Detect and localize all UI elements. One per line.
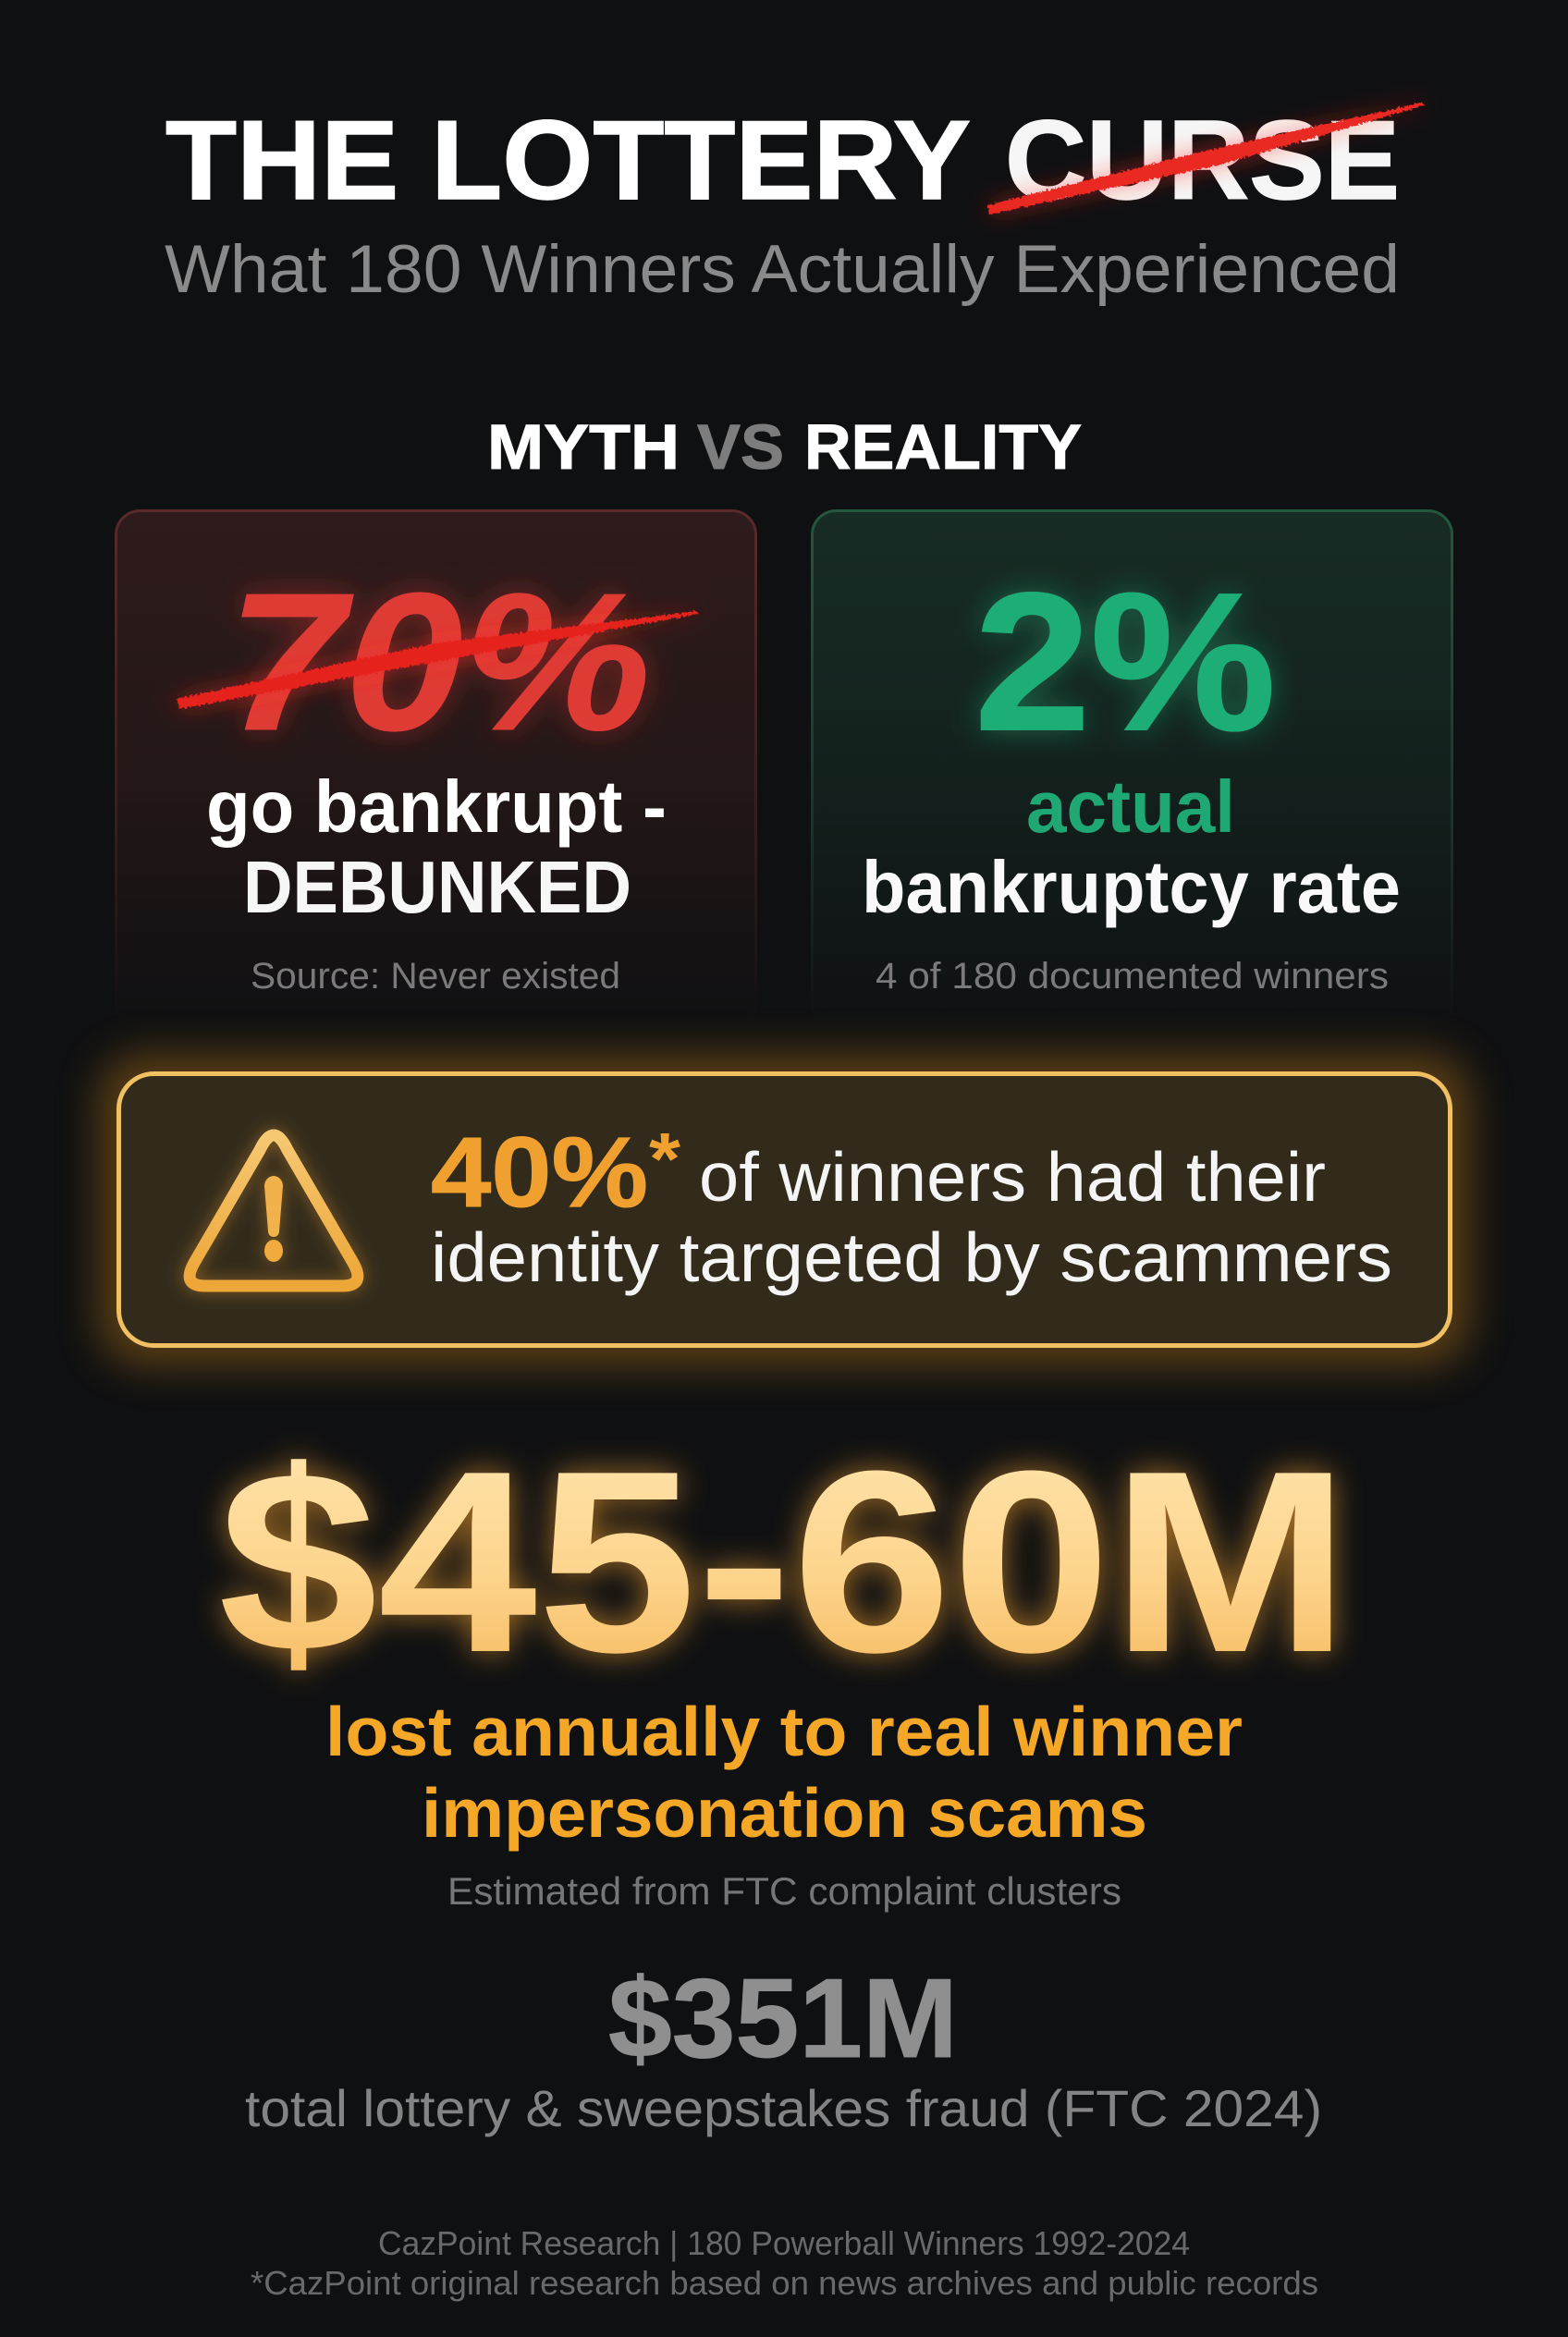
callout text: of winners had their — [699, 1138, 1326, 1216]
red strike through 70% — [177, 611, 699, 709]
footer: CazPoint Research | 180 Powerball Winners 1992-2024 — [378, 2224, 1190, 2262]
annual loss description — [325, 1693, 1243, 1852]
footer: *CazPoint original research based on news archives and public records — [251, 2264, 1318, 2302]
section heading: myth vs reality: MYTH — [487, 411, 680, 483]
annual loss description: lost annually to real winner — [325, 1693, 1243, 1770]
myth label — [206, 765, 667, 928]
annual loss description: impersonation scams — [422, 1774, 1147, 1852]
red strike through CURSE — [987, 103, 1425, 214]
myth label: DEBUNKED — [243, 846, 631, 928]
callout text: identity targeted by scammers — [431, 1218, 1392, 1296]
panel: myth card — [116, 510, 756, 1028]
section heading: myth vs reality — [487, 411, 1082, 483]
panel: reality card — [812, 510, 1452, 1028]
reality source: 4 of 180 documented winners — [876, 956, 1389, 997]
big number: annual loss: $45-60M — [218, 1418, 1350, 1707]
big number 2%: 2% — [974, 552, 1276, 771]
myth source: Source: Never existed — [251, 956, 620, 997]
icon: warning triangle — [190, 1135, 358, 1286]
stat 40%: * — [649, 1118, 681, 1200]
total fraud description: total lottery & sweepstakes fraud (FTC 2024) — [245, 2079, 1322, 2137]
section heading: myth vs reality: REALITY — [804, 411, 1082, 483]
stat: total fraud: $351M — [608, 1955, 958, 2081]
myth label: go bankrupt - — [206, 765, 667, 848]
reality label — [862, 765, 1401, 928]
title: CURSE — [1005, 97, 1400, 223]
subtitle: What 180 Winners Actually Experienced — [165, 232, 1400, 307]
footer — [251, 2224, 1318, 2302]
big number 70%: 70% — [227, 552, 651, 771]
reality label: bankruptcy rate — [862, 846, 1401, 928]
reality label: actual — [1026, 765, 1235, 848]
panel: scam warning callout — [98, 1053, 1471, 1366]
annual loss source: Estimated from FTC complaint clusters — [447, 1869, 1121, 1913]
callout text — [431, 1138, 1392, 1296]
stat 40%: 40% — [431, 1116, 648, 1228]
title: THE LOTTERY — [165, 97, 971, 223]
section heading: myth vs reality: VS — [697, 411, 784, 483]
title — [165, 97, 1425, 223]
